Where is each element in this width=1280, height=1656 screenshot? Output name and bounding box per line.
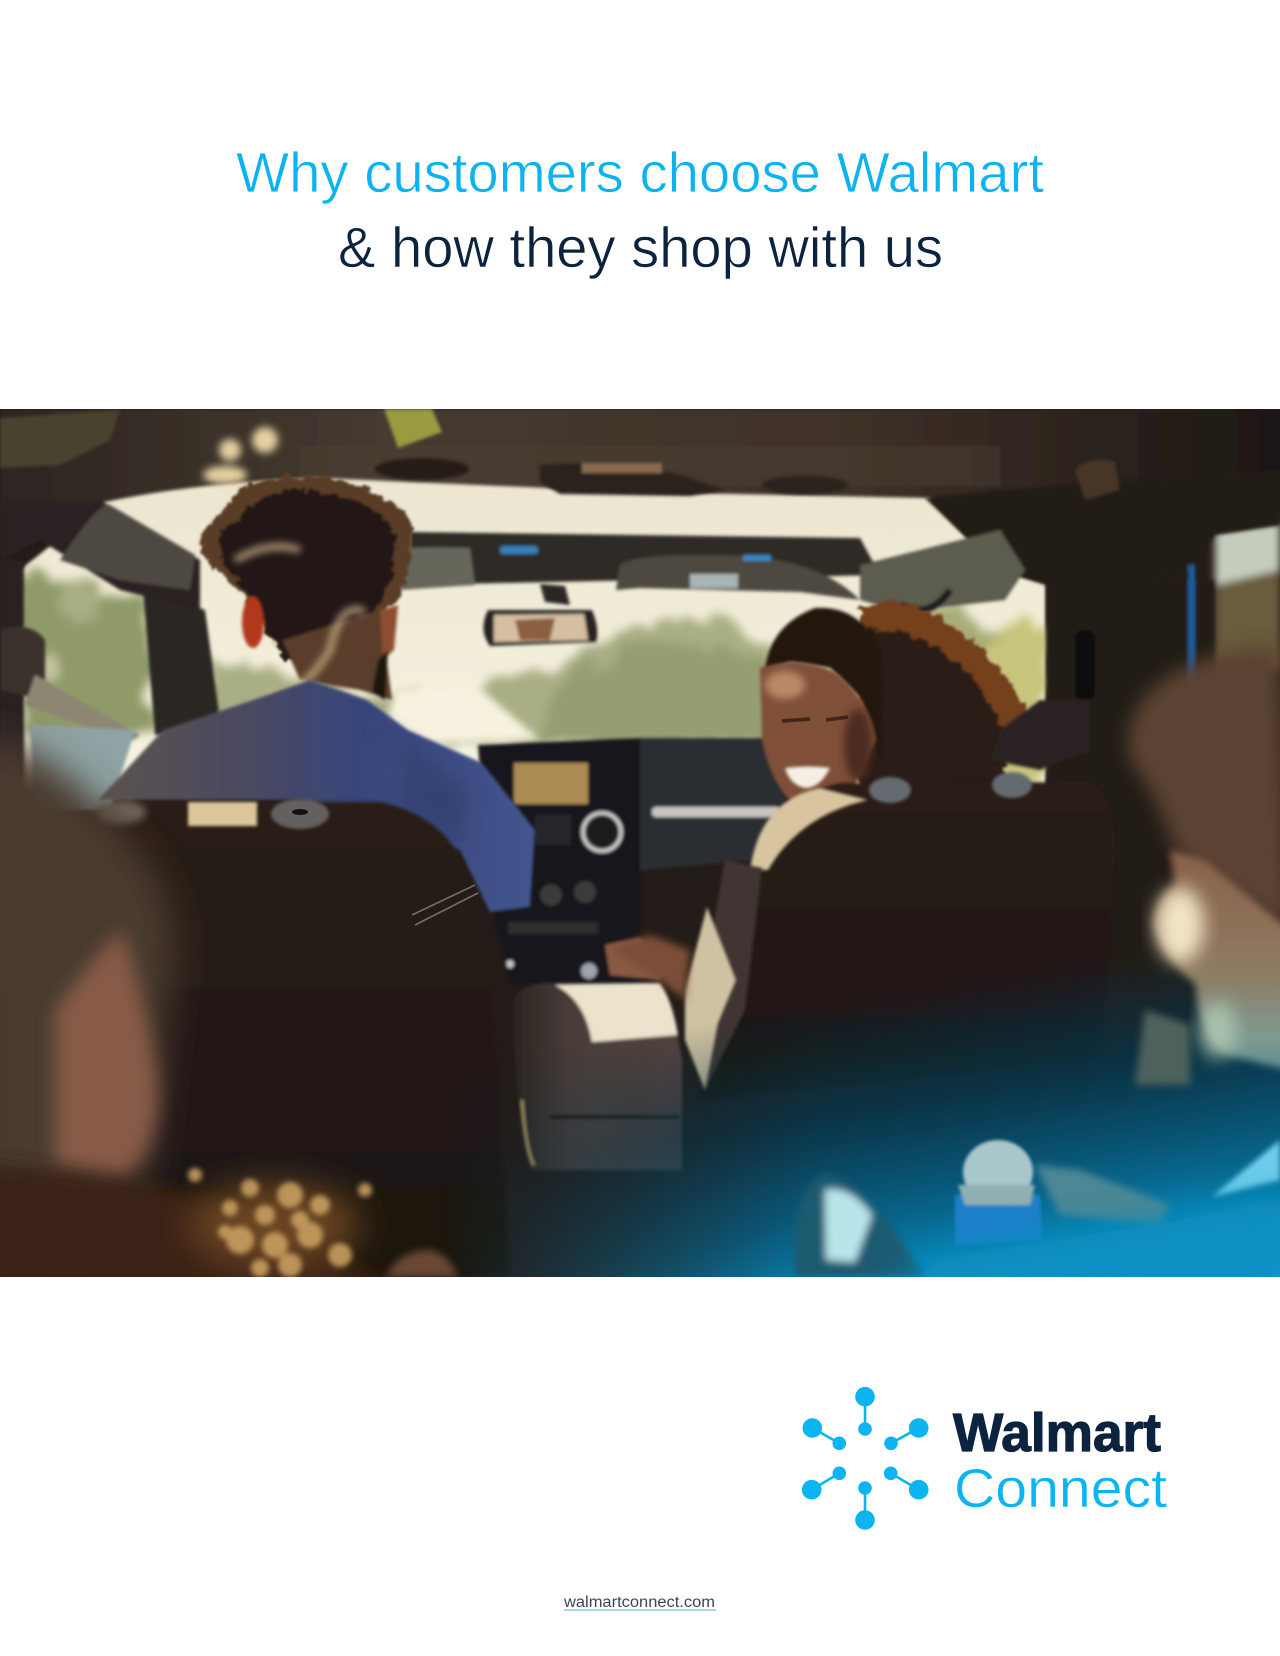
dashboard centre xyxy=(478,738,790,985)
hero photo: family in a car xyxy=(0,409,1280,1295)
knuckles bottom left xyxy=(385,1250,458,1277)
logo word Walmart: Walmart xyxy=(953,1403,1161,1463)
woman hair top xyxy=(765,608,882,760)
foreground girl face xyxy=(55,930,158,1178)
knee xyxy=(794,1173,926,1277)
windshield sky xyxy=(20,478,1046,790)
foreground teal blur xyxy=(880,1195,1280,1295)
overhead bar and sun visors xyxy=(400,532,880,600)
driver seat xyxy=(94,798,510,1275)
foreground girl hair xyxy=(0,730,175,1277)
golden bokeh xyxy=(188,1168,372,1277)
right side window xyxy=(1215,522,1280,670)
title line 1: Why customers choose Walmart xyxy=(236,141,1044,205)
woman arm strap xyxy=(990,700,1090,770)
left pillar and roll bar xyxy=(0,500,221,811)
road xyxy=(380,680,540,745)
blue colour wash xyxy=(468,969,1280,1277)
rear-view mirror xyxy=(483,584,597,646)
boy hair xyxy=(1129,648,1280,930)
driver shirt xyxy=(98,680,535,912)
footer link: walmartconnect.com xyxy=(563,1594,715,1611)
woman face xyxy=(760,662,876,800)
driver neck and ear xyxy=(242,596,398,700)
logo spark icon xyxy=(802,1387,928,1530)
passenger hand xyxy=(610,935,690,1000)
title xyxy=(236,141,1044,280)
passenger seat xyxy=(685,772,1115,1100)
foreground girl lower hair xyxy=(0,1156,378,1277)
right pillar and roof corner xyxy=(858,480,1280,784)
blurred foreground hair wisps xyxy=(235,547,365,708)
boy shirt xyxy=(1212,1140,1280,1197)
roof details: speakers, grille, leaf xyxy=(0,409,1120,500)
logo: Walmart Connect xyxy=(802,1387,1167,1530)
title line 2: & how they shop with us xyxy=(338,216,943,280)
woman curly hair xyxy=(860,602,1030,790)
logo word Connect: Connect xyxy=(954,1457,1167,1519)
car roof xyxy=(0,409,1083,502)
boy face xyxy=(1154,850,1280,1070)
arm xyxy=(1035,1165,1170,1225)
left side window trees xyxy=(15,570,150,730)
water bottle xyxy=(955,1140,1042,1245)
driver hair xyxy=(200,476,413,660)
center console armrest xyxy=(514,983,682,1170)
back seat fabric xyxy=(1135,1010,1190,1085)
bokeh over roof xyxy=(203,427,278,484)
windshield trees xyxy=(205,605,1046,790)
